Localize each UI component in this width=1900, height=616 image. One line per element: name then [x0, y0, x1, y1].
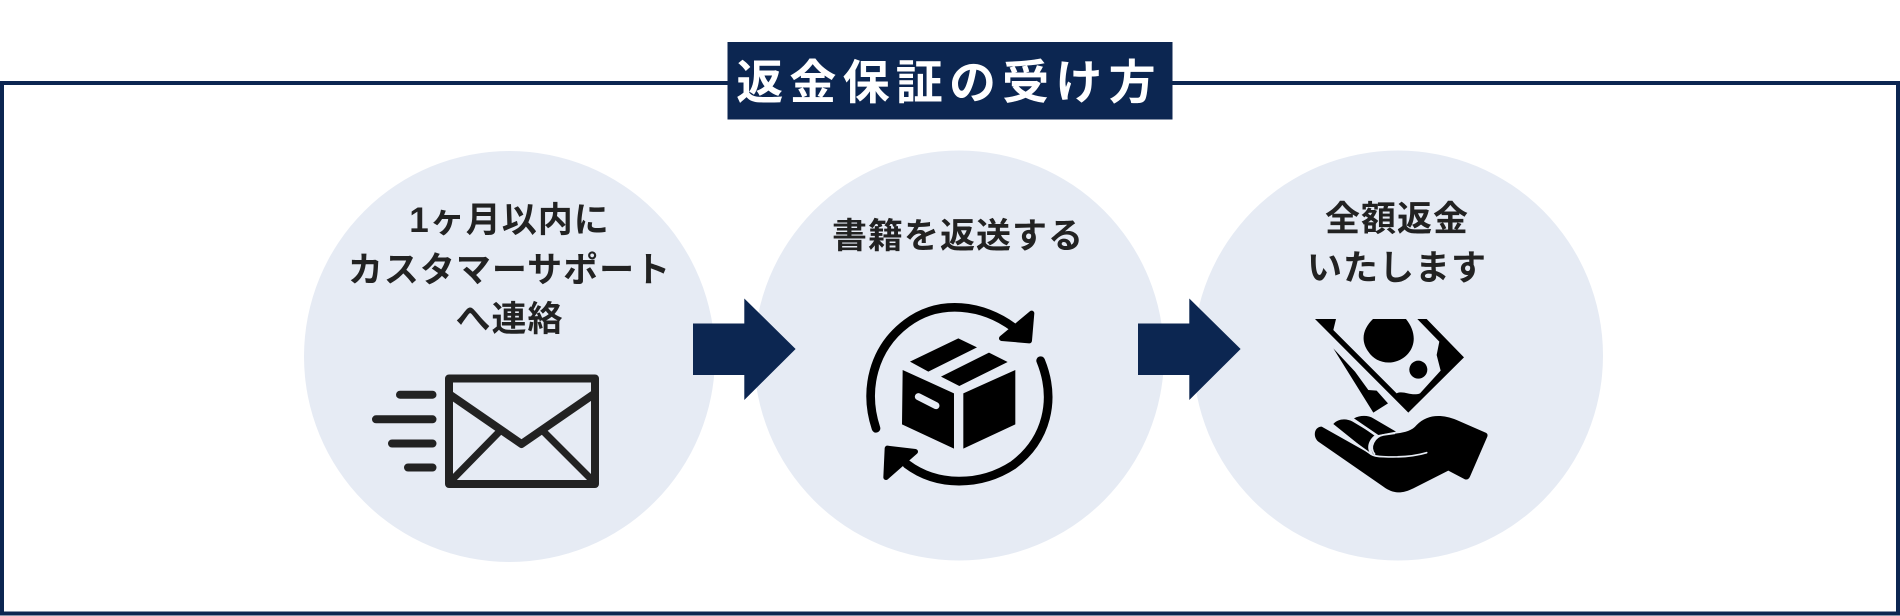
step 2 circle	[754, 150, 1164, 560]
icon: box with return arrows	[871, 307, 1048, 481]
icon: envelope with speed lines	[376, 378, 595, 484]
step 3 text: いたします	[1307, 249, 1487, 288]
step 1 text: へ連絡	[455, 300, 564, 339]
step 3: full refund	[1193, 150, 1603, 560]
step 3 text: 全額返金	[1325, 200, 1469, 239]
step 1 circle	[304, 151, 715, 562]
title: 返金保証の受け方	[736, 56, 1162, 109]
arrow: step 1 to step 2	[693, 298, 796, 400]
step 2: return the book	[754, 150, 1164, 560]
step 1 text: カスタマーサポート	[348, 251, 671, 290]
title	[728, 42, 1172, 120]
step 1 text: 1ヶ月以内に	[409, 201, 610, 240]
arrow: step 2 to step 3	[1138, 298, 1241, 400]
icon: banknotes falling into hand	[1315, 319, 1488, 492]
step 3 circle	[1193, 150, 1603, 560]
step 2 text: 書籍を返送する	[832, 217, 1084, 256]
step 1: contact customer support	[304, 151, 715, 562]
